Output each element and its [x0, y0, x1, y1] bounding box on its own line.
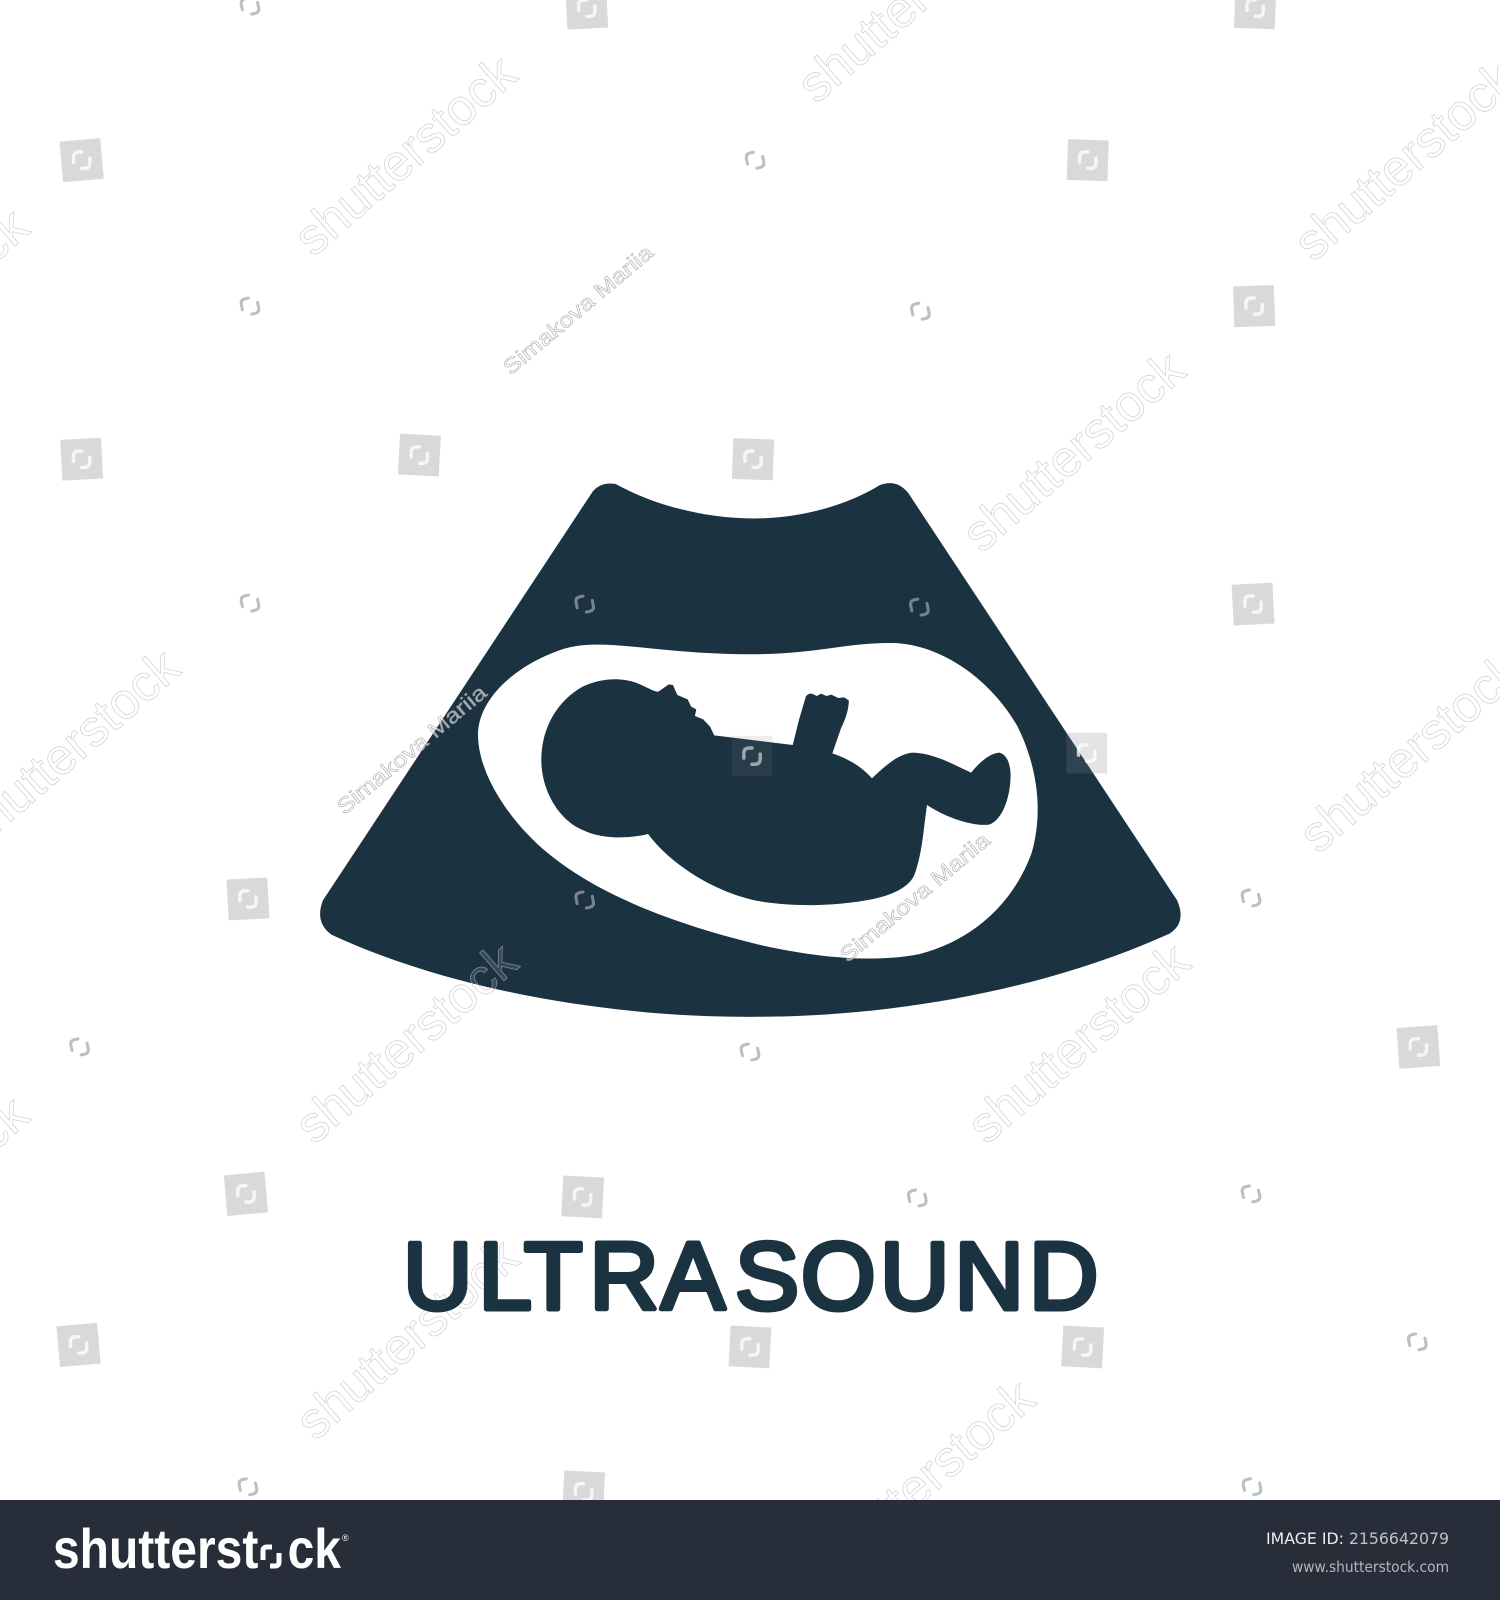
watermark: contributor name: Simakova Mariia — [332, 680, 492, 819]
footer bar — [0, 1500, 1500, 1600]
watermark: contributor name — [332, 240, 995, 967]
footer logo: shutterstock — [53, 1517, 342, 1580]
watermark: shutterstock diagonal text: shutterstock — [801, 1368, 1045, 1591]
amniotic sac — [478, 643, 1038, 959]
fetus silhouette — [541, 679, 1011, 905]
website: www.shutterstock.com — [1292, 1558, 1449, 1576]
icon: ultrasound scan fan with fetus — [320, 483, 1181, 1017]
watermark: shutterstock diagonal text: shutterstock — [284, 931, 528, 1154]
watermark: contributor name: Simakova Mariia — [835, 828, 995, 967]
watermark: contributor name: Simakova Mariia — [499, 240, 658, 379]
watermark: shutterstock diagonal text: shutterstock — [951, 340, 1195, 562]
title: ULTRASOUND — [403, 1223, 1098, 1330]
watermark: shutterstock diagonal text: shutterstock — [956, 931, 1201, 1154]
footer logo: ® — [342, 1533, 349, 1543]
watermark: shutterstock diagonal text: shutterstock — [283, 44, 527, 266]
watermark: shutterstock diagonal text: shutterstock — [285, 1227, 529, 1450]
ultrasound fan shape — [320, 483, 1181, 1017]
image id: IMAGE ID: 2156642079 — [1266, 1529, 1449, 1548]
